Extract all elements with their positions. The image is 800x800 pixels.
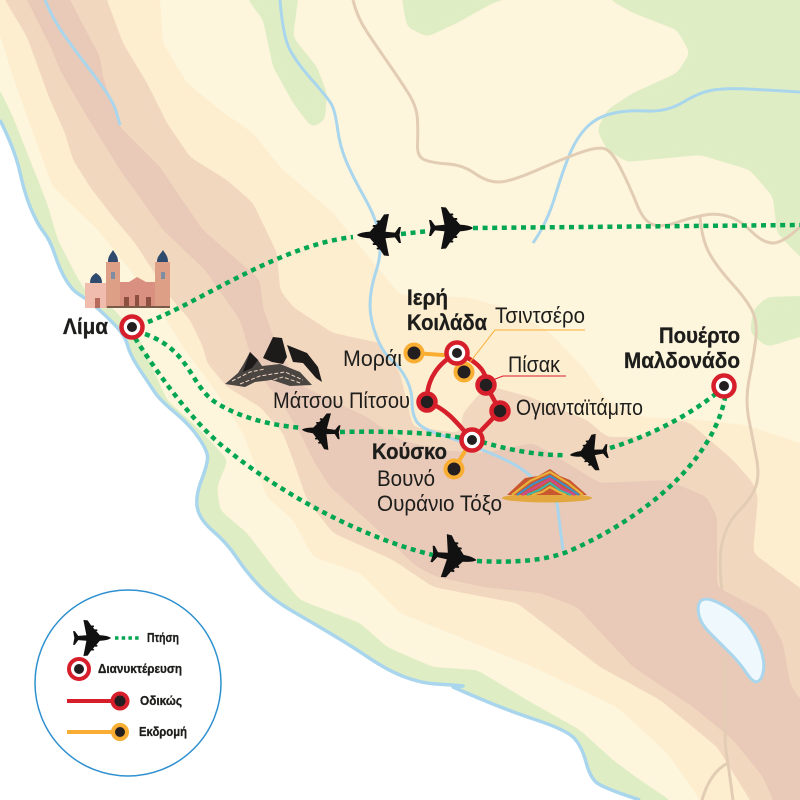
- icon: Lima cathedral: [85, 250, 170, 308]
- icon: Rainbow Mountain: [502, 469, 592, 502]
- legend: by road: [67, 694, 182, 708]
- place labels: [63, 285, 740, 516]
- lake: [698, 599, 764, 682]
- place labels: Κούσκο: [372, 439, 447, 464]
- place labels: Ιερή: [407, 285, 448, 310]
- place labels: Ουράνιο Τόξο: [377, 491, 502, 516]
- plane icons: [301, 207, 610, 582]
- road routes: [427, 353, 500, 440]
- flight routes: [135, 225, 800, 562]
- icon: Machu Picchu mountain: [225, 337, 322, 387]
- legend: excursion: [67, 725, 187, 739]
- place labels: Ογιανταϊτάμπο: [516, 395, 643, 420]
- place labels: Πίσακ: [508, 352, 561, 377]
- place labels: Μάτσου Πίτσου: [273, 388, 410, 413]
- legend panel: [35, 590, 221, 776]
- rivers: [45, 0, 800, 550]
- place labels: Λίμα: [63, 314, 108, 339]
- excursion routes: [414, 353, 472, 469]
- legend: flight: Πτήση: [147, 631, 179, 645]
- place labels: Μαλδονάδο: [624, 348, 740, 373]
- place labels: Βουνό: [377, 466, 435, 491]
- legend: by road: Οδικώς: [140, 694, 182, 708]
- callout leader lines: [470, 330, 585, 381]
- legend: excursion: Εκδρομή: [139, 725, 187, 739]
- coastline: [0, 120, 640, 800]
- roads: [353, 0, 800, 800]
- place labels: Τσιντσέρο: [495, 303, 585, 328]
- place labels: Κοιλάδα: [407, 310, 487, 335]
- legend: flight: [73, 620, 179, 656]
- place labels: Μοράι: [343, 346, 402, 371]
- excursion markers: [406, 344, 472, 478]
- place labels: Πουέρτο: [659, 323, 740, 348]
- overnight markers: [122, 316, 734, 450]
- legend: overnight: [69, 659, 182, 679]
- legend: overnight: Διανυκτέρευση: [98, 662, 182, 676]
- road markers: [418, 376, 508, 420]
